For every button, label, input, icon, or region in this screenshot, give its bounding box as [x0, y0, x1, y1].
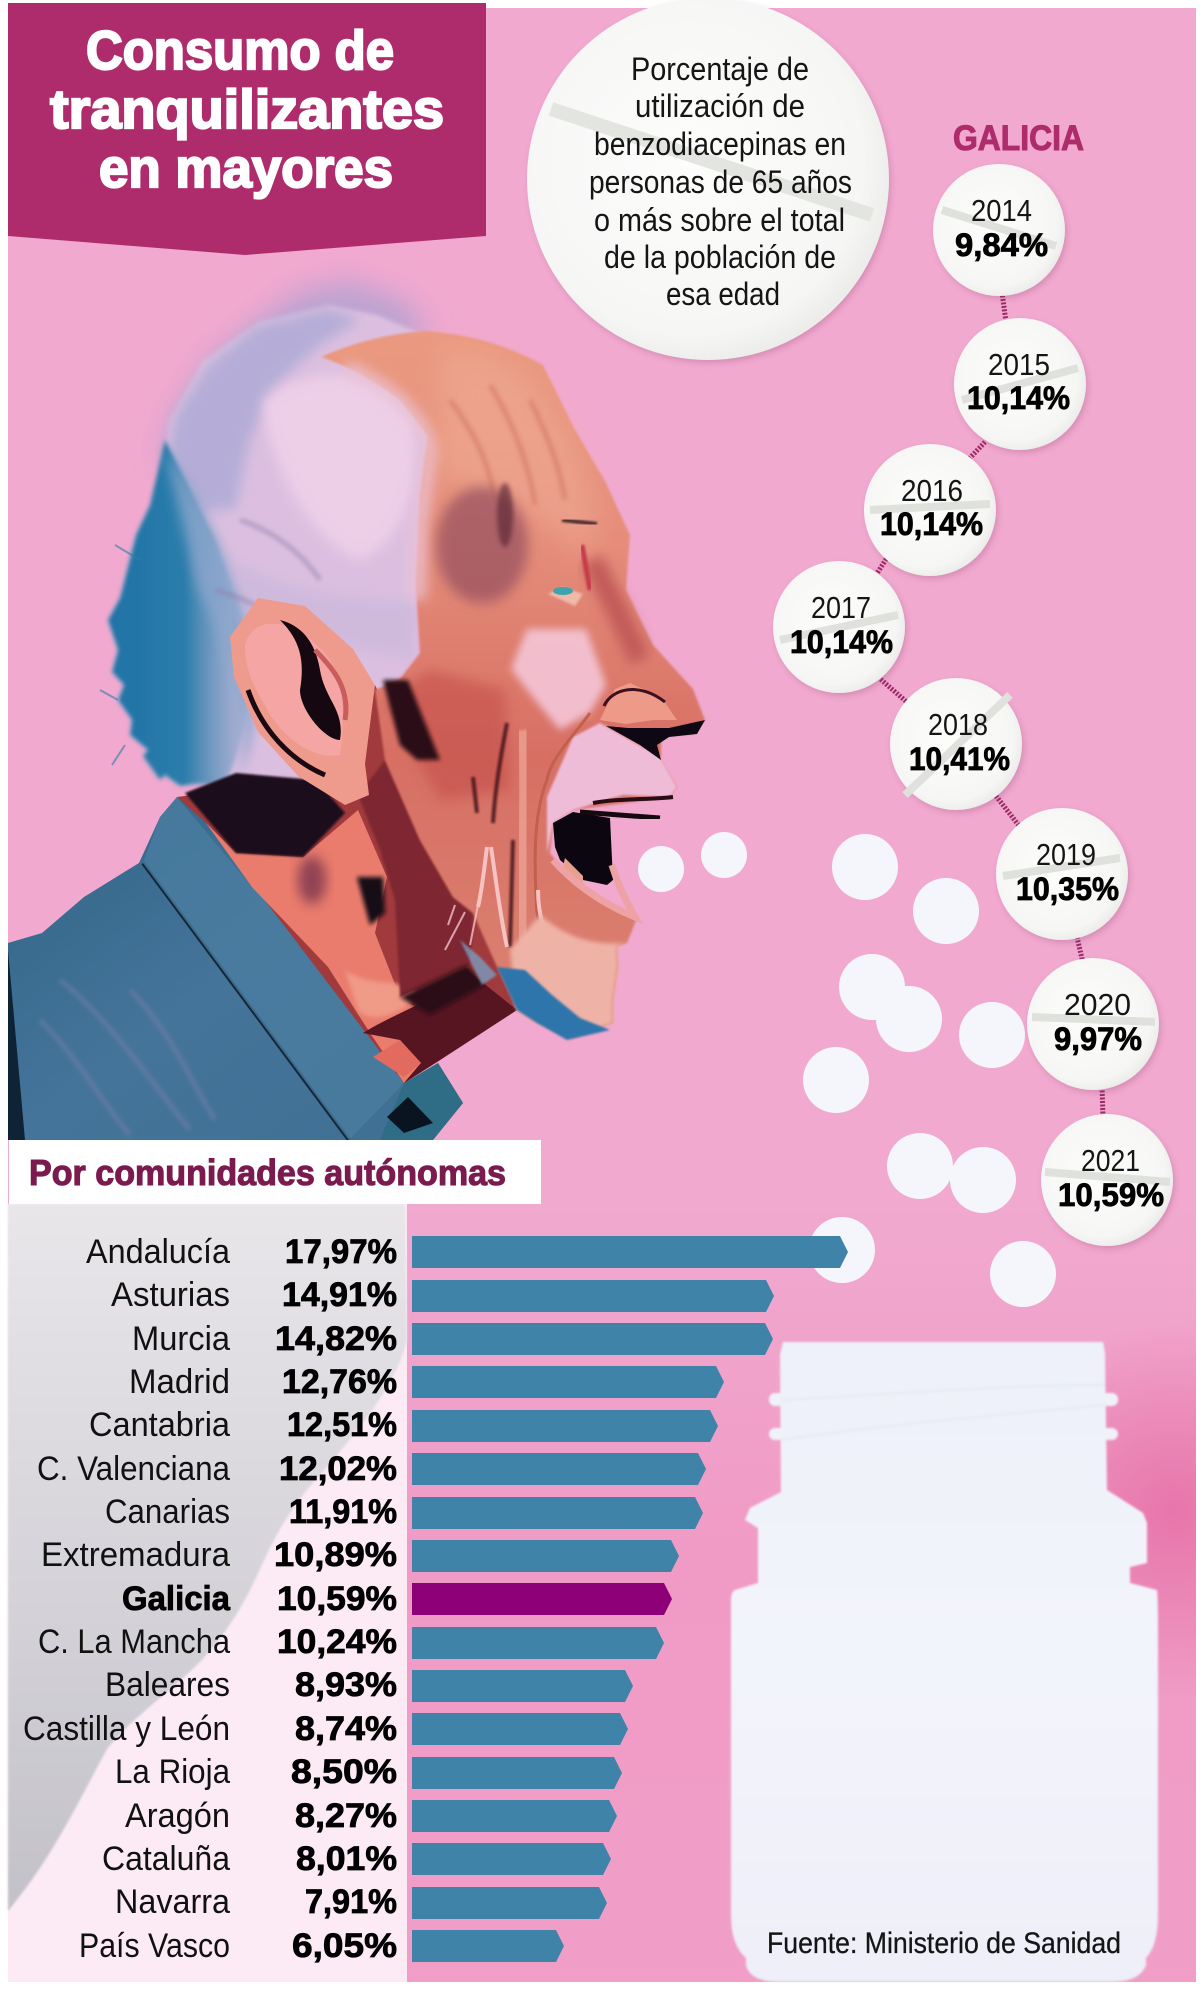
description text	[589, 51, 852, 312]
pill: 2018: 10,41%	[909, 741, 1010, 777]
lower-face shadow	[385, 670, 510, 800]
row: Madrid	[129, 1363, 724, 1401]
description text: Porcentaje de	[631, 51, 809, 87]
face	[321, 331, 705, 1040]
row: C. Valenciana: C. Valenciana	[37, 1450, 230, 1488]
row: Canarias	[105, 1493, 703, 1531]
row: Galicia	[122, 1580, 672, 1618]
temple shadow	[436, 487, 528, 603]
heading: Galicia: GALICIA	[953, 119, 1084, 158]
row: Andalucía	[86, 1233, 848, 1271]
row: País Vasco	[79, 1927, 564, 1965]
row: Canarias: 11,91%	[289, 1493, 397, 1531]
nose-bridge shadow	[592, 560, 640, 660]
row: Murcia	[132, 1320, 773, 1358]
row: La Rioja	[115, 1753, 622, 1791]
row: C. Valenciana: 12,02%	[279, 1450, 397, 1488]
row: Galicia: Galicia	[122, 1580, 231, 1618]
row: Murcia: 14,82%	[275, 1320, 397, 1358]
hair halo	[160, 280, 430, 470]
pill: 2020	[1027, 958, 1159, 1090]
main description pill	[527, 0, 889, 360]
wrinkles	[473, 723, 513, 947]
row: C. La Mancha: C. La Mancha	[38, 1623, 230, 1661]
pill: 2016: 2016	[901, 473, 963, 508]
row: Andalucía: 17,97%	[285, 1233, 397, 1271]
row: Cantabria: Cantabria	[89, 1406, 230, 1444]
pill: 2016: 10,14%	[880, 506, 983, 542]
title text: tranquilizantes	[50, 78, 444, 140]
row: Madrid: Madrid	[129, 1363, 230, 1401]
pill: 2020: 2020	[1064, 987, 1131, 1022]
title text	[50, 19, 444, 199]
ear	[230, 598, 375, 805]
pill: 2017	[773, 561, 905, 693]
cheek highlight	[511, 629, 606, 730]
row: La Rioja: La Rioja	[115, 1753, 230, 1791]
pill: 2014: 9,84%	[955, 227, 1048, 263]
pill: 2020: 9,97%	[1054, 1021, 1142, 1057]
neck	[177, 685, 517, 1083]
nose	[600, 683, 677, 724]
eye	[548, 587, 583, 606]
panel: label background with pillow	[8, 1204, 407, 1982]
white loose pills	[638, 832, 1056, 1307]
hair	[100, 305, 430, 790]
row: Andalucía: Andalucía	[86, 1233, 230, 1271]
pill: 2014: 2014	[971, 193, 1032, 228]
row: Extremadura: Extremadura	[41, 1536, 230, 1574]
row: Navarra	[115, 1883, 607, 1921]
row: La Rioja: 8,50%	[291, 1753, 397, 1791]
bottle	[731, 1342, 1158, 1982]
title banner	[8, 3, 486, 255]
shirt	[8, 797, 463, 1140]
pill: 2021: 10,59%	[1058, 1177, 1164, 1213]
heading: por comunidades autónomas	[9, 1140, 541, 1204]
row: Navarra: 7,91%	[305, 1883, 397, 1921]
row: Cataluña: Cataluña	[102, 1840, 230, 1878]
forehead highlight	[444, 358, 592, 544]
connectors between yearly pills	[876, 292, 1103, 1118]
pill: 2018	[890, 678, 1022, 810]
pill: 2021: 2021	[1081, 1143, 1140, 1178]
illustration: elderly man shouting in profile	[8, 280, 705, 1140]
mouth	[553, 812, 613, 885]
row: C. La Mancha: 10,24%	[277, 1623, 397, 1661]
description text: o más sobre el total	[594, 202, 845, 238]
lower lip	[553, 860, 635, 917]
row: Castilla y León: 8,74%	[295, 1710, 397, 1748]
row: Aragón	[125, 1797, 617, 1835]
row: Asturias: 14,91%	[282, 1276, 397, 1314]
row: Murcia: Murcia	[132, 1320, 230, 1358]
forehead wrinkles	[450, 385, 565, 505]
description text: benzodiacepinas en	[594, 126, 846, 162]
pill: 2019: 10,35%	[1016, 871, 1119, 907]
row: Baleares: 8,93%	[295, 1666, 397, 1704]
pill: 2018: 2018	[928, 707, 988, 742]
row: Canarias: Canarias	[105, 1493, 230, 1531]
source: Fuente: Ministerio de Sanidad	[767, 1927, 1121, 1960]
row: Aragón: Aragón	[125, 1797, 230, 1835]
title text: Consumo de	[86, 19, 394, 81]
pill: 2015	[954, 318, 1086, 450]
description text: esa edad	[666, 276, 780, 312]
description text: de la población de	[604, 239, 836, 275]
row: Navarra: Navarra	[115, 1883, 230, 1921]
row: Cantabria	[89, 1406, 718, 1444]
row: Asturias	[111, 1276, 774, 1314]
row: C. La Mancha	[38, 1623, 664, 1661]
pill: 2017: 2017	[811, 590, 871, 625]
pill: 2019	[996, 808, 1128, 940]
row: País Vasco: País Vasco	[79, 1927, 230, 1965]
row: País Vasco: 6,05%	[292, 1927, 397, 1965]
row: C. Valenciana	[37, 1450, 706, 1488]
chin and beard	[510, 915, 627, 1038]
row: Baleares: Baleares	[105, 1666, 230, 1704]
row: Galicia: 10,59%	[277, 1580, 397, 1618]
pill: 2015: 10,14%	[967, 380, 1070, 416]
heading: por comunidades autónomas: Por comunidades autónomas	[29, 1152, 506, 1193]
pill: 2016	[864, 444, 996, 576]
soft hairline	[345, 368, 430, 600]
pill: 2014	[933, 164, 1065, 296]
row: Castilla y León	[23, 1710, 628, 1748]
row: Cantabria: 12,51%	[287, 1406, 397, 1444]
description text: utilización de	[635, 88, 805, 124]
row: Cataluña: 8,01%	[296, 1840, 397, 1878]
row: Baleares	[105, 1666, 633, 1704]
row: Madrid: 12,76%	[282, 1363, 397, 1401]
pill: 2015: 2015	[988, 347, 1050, 382]
row: Asturias: Asturias	[111, 1276, 230, 1314]
pill: 2021	[1041, 1114, 1173, 1246]
pill: 2019: 2019	[1036, 837, 1096, 872]
moustache	[547, 723, 677, 853]
bar chart: autonomous communities	[23, 1233, 848, 1965]
row: Cataluña	[102, 1840, 611, 1878]
pill: 2017: 10,14%	[790, 624, 893, 660]
row: Extremadura	[41, 1536, 679, 1574]
title text: en mayores	[99, 137, 393, 199]
row: Extremadura: 10,89%	[274, 1536, 397, 1574]
description text: personas de 65 años	[589, 164, 852, 200]
row: Aragón: 8,27%	[295, 1797, 397, 1835]
row: Castilla y León: Castilla y León	[23, 1710, 230, 1748]
